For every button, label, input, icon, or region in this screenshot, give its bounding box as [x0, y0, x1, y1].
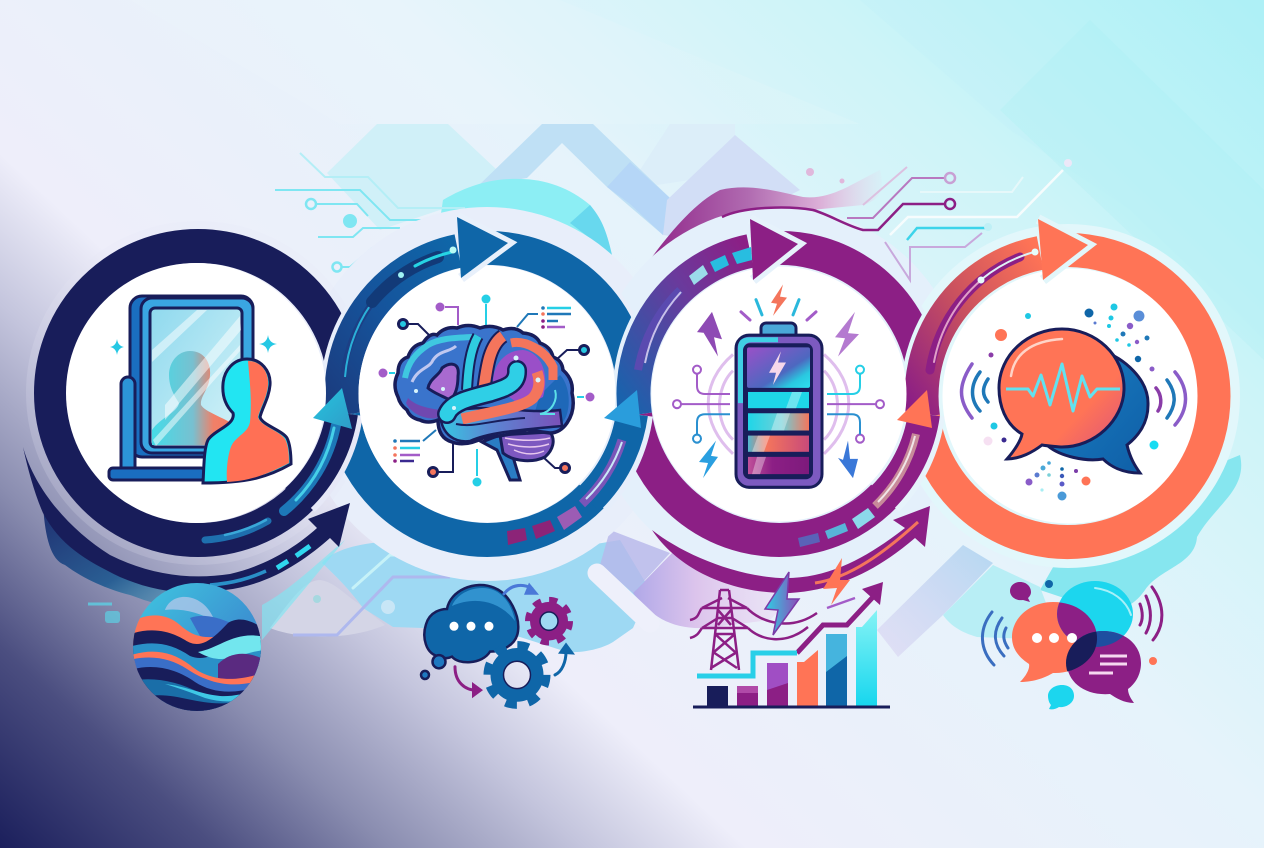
pale halo discs behind rings	[26, 207, 1240, 581]
power wires	[690, 608, 817, 639]
dots	[984, 304, 1158, 500]
growth line	[797, 597, 873, 653]
background blob: pale left of fourth ring	[943, 565, 1060, 640]
icon: battery	[673, 284, 884, 487]
bubble shine	[1095, 588, 1131, 615]
icon: overlapping chat bubbles	[982, 580, 1162, 709]
coral wave	[133, 615, 214, 695]
charge cell top	[747, 347, 810, 388]
temporal fold line	[456, 418, 525, 425]
background blob: purple band	[600, 530, 670, 593]
tower	[690, 590, 817, 670]
background blob: pink lilac	[633, 550, 790, 628]
streak: ring one lower right	[205, 425, 336, 540]
purple arrow tip	[472, 682, 483, 698]
temporal lobe	[440, 408, 562, 441]
arrow: ring three up	[897, 390, 932, 428]
purple bubble	[1067, 631, 1141, 703]
icon: mirror and person	[109, 296, 291, 483]
battery inner	[743, 343, 813, 479]
back bubble	[1048, 350, 1148, 473]
streak: ring two top	[372, 246, 456, 302]
mirror glints	[152, 310, 241, 446]
tiny bubble	[421, 671, 429, 679]
sparkles	[110, 339, 124, 355]
blue bolts	[699, 441, 718, 478]
streak: ring two lower right	[507, 440, 622, 545]
white discs	[66, 263, 1198, 524]
plum wave	[218, 654, 260, 688]
battery cap	[761, 323, 796, 339]
blue wave	[133, 642, 261, 680]
battery bolt	[769, 351, 786, 385]
purple bolts	[697, 312, 722, 356]
right circuit detail	[540, 390, 556, 414]
arrow: ring one up	[313, 388, 352, 429]
bubble dots	[1032, 633, 1077, 643]
sound waves	[962, 364, 1186, 425]
arrow: ring three top head	[750, 219, 798, 280]
swoosh: purple above ring three	[637, 170, 882, 278]
lower blue wave	[142, 679, 236, 711]
purple coral overlap	[1066, 631, 1124, 672]
brain stem	[482, 435, 520, 480]
sphere base	[133, 583, 261, 711]
lightning coral	[823, 558, 850, 605]
streak: ring three top	[638, 247, 752, 370]
ring two: blue arc	[341, 248, 633, 540]
purple gear	[529, 601, 569, 641]
circuit lines: top left	[235, 153, 465, 272]
ring two lower right overlay	[588, 414, 632, 500]
brain leader lines	[378, 294, 594, 486]
bars	[707, 610, 877, 707]
person coral half	[227, 361, 289, 482]
charge bar two	[748, 413, 809, 431]
background bar: pale diagonal	[597, 573, 650, 623]
icon: cloud and gears	[421, 583, 575, 704]
background blob: cyan behind fourth ring	[1040, 455, 1241, 611]
streak: ring two left	[343, 288, 385, 380]
mirror frame	[109, 296, 253, 480]
bar glints	[752, 392, 802, 474]
right purple lobe	[493, 350, 545, 407]
person	[203, 359, 291, 483]
background blob: light blue behind second icon	[322, 540, 650, 652]
arrow: ring two top head	[457, 217, 508, 278]
thin coral wave	[134, 652, 254, 711]
ring one: navy circle	[51, 246, 345, 540]
ring four: coral arc	[922, 250, 1213, 542]
left light folds	[412, 346, 456, 382]
spark line	[827, 598, 855, 608]
sparks and rays	[771, 284, 787, 316]
bottom navy	[155, 695, 228, 711]
small purple bubble	[1010, 582, 1031, 602]
sphere highlight	[165, 596, 213, 617]
waveform	[1006, 364, 1120, 411]
background blob: lilac chevron	[877, 545, 993, 657]
cyan ribbon outline	[447, 370, 517, 414]
brain list labels	[393, 306, 571, 463]
ring three: purple arc	[633, 248, 925, 540]
front bubble	[999, 329, 1124, 459]
right lobe dark blue	[530, 375, 569, 428]
charge bar four	[748, 457, 809, 474]
central cyan fold	[467, 336, 478, 390]
cycle arrows	[455, 585, 566, 690]
mirror reflection	[152, 351, 234, 445]
lower navy wave	[136, 667, 244, 711]
arrow: ring four top head	[1038, 219, 1088, 280]
central cyan fold outline	[467, 336, 478, 390]
sound arcs	[982, 587, 1162, 665]
battery left shine	[738, 337, 778, 403]
cerebellum stripes	[505, 438, 550, 454]
cerebellum	[500, 432, 553, 461]
arrow: ring two up	[604, 390, 641, 428]
ring one lower right overlay	[296, 413, 342, 500]
icon: power tower and growth chart	[690, 558, 890, 707]
lower left circuit lines	[293, 555, 450, 635]
cyan ribbon	[447, 370, 517, 414]
crescent arrow: under ring one	[23, 447, 350, 623]
field arcs	[708, 354, 849, 454]
background swoosh: cyan above ring two	[440, 179, 610, 250]
cloud highlight	[452, 588, 515, 621]
icon: speech bubbles with waveform	[962, 304, 1186, 500]
streak: ring three lower right	[798, 434, 916, 547]
small bubbles	[432, 655, 446, 668]
cyan wave	[166, 684, 240, 702]
icon: brain	[378, 294, 594, 486]
circuit lines: top right	[722, 159, 1072, 280]
charge bar one	[748, 392, 809, 408]
upper left cyan edge	[405, 337, 472, 378]
blue arrow tip	[558, 642, 575, 655]
coral fold outline	[484, 336, 503, 388]
light cyan wave	[198, 635, 265, 659]
arrow gap: ring three	[750, 219, 798, 280]
small cyan bubble	[1048, 685, 1074, 709]
cyan bubble	[1057, 581, 1133, 647]
royal blue wave	[134, 658, 250, 711]
blue gear	[488, 646, 546, 704]
cloud	[424, 585, 518, 662]
background geometric shapes	[130, 0, 1264, 360]
purple fold	[428, 364, 458, 400]
bubble shine	[1011, 339, 1062, 376]
streak: ring four top	[930, 248, 1038, 370]
battery circuits	[673, 366, 884, 443]
growth head	[862, 582, 883, 605]
arrow gap: ring four	[1038, 219, 1088, 280]
coral ribbon	[462, 372, 539, 419]
cloud dots	[450, 622, 494, 631]
brain outline	[395, 326, 573, 444]
crescent arrow: under ring three	[652, 506, 930, 593]
ring three lower right overlay	[880, 414, 924, 500]
crescent: blob under ring one	[43, 505, 200, 604]
bubble lines	[1089, 656, 1127, 673]
background blob: grey hill	[270, 580, 385, 637]
battery body	[736, 335, 822, 487]
background swoosh: darker cyan	[570, 205, 612, 255]
background swoosh: cyan arrow wash	[262, 540, 345, 640]
lower left purple	[406, 398, 441, 418]
navy wave	[133, 620, 261, 694]
coral fold	[484, 336, 503, 388]
arrow gap: ring two	[457, 217, 508, 278]
brain nodes	[414, 356, 540, 410]
sphere blue patch	[190, 616, 229, 638]
coral cyan overlap	[1057, 602, 1096, 642]
charge bar three	[748, 436, 809, 452]
chart baseline	[693, 706, 890, 708]
arrow tips	[524, 583, 539, 595]
growth line cyan	[697, 653, 797, 676]
orange dot	[1149, 657, 1157, 665]
lightning big	[765, 572, 799, 635]
icon: wave sphere	[133, 583, 261, 711]
coral upper band	[511, 342, 553, 380]
coral bubble	[1012, 602, 1097, 682]
blue dot	[1045, 580, 1053, 588]
